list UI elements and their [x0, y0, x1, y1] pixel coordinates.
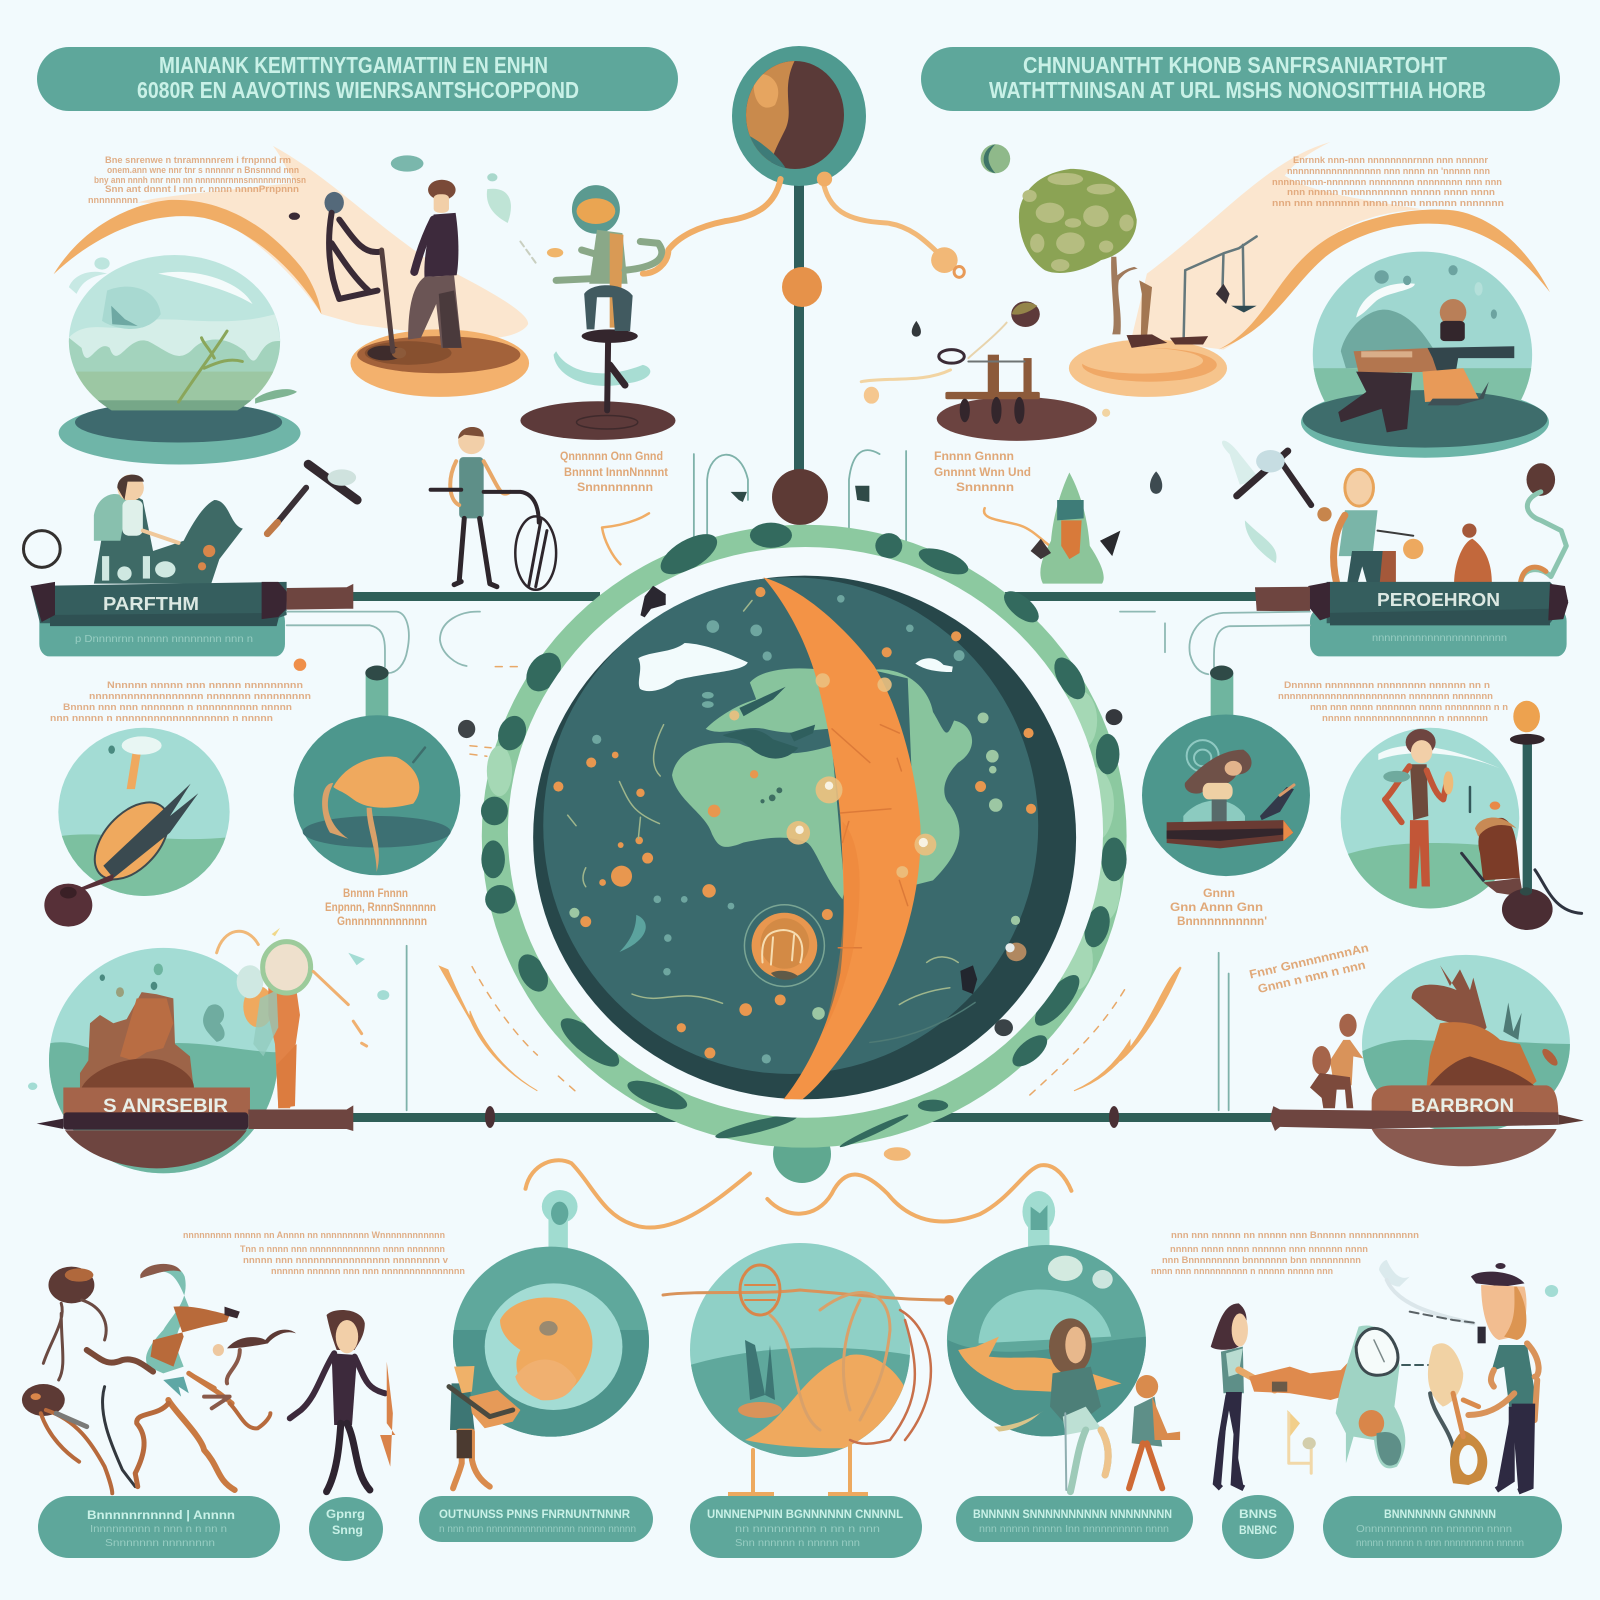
vertical line left — [406, 946, 408, 1110]
caption bottom right: nnn nnn nnnnn nn nnnnn nnn Bnnnnn nnnnnnnnnnnn — [1171, 1230, 1419, 1240]
pill five — [956, 1496, 1193, 1542]
caption block top right: nnn nnnnn nnnnnnnnnnn nnnnn nnnn nnnn — [1287, 187, 1495, 197]
pill text four — [707, 1507, 903, 1549]
flask woman — [1049, 1318, 1108, 1492]
thin pipes left — [287, 612, 480, 673]
glass dome with base — [59, 253, 301, 464]
bottom-left scene — [22, 1190, 653, 1493]
caption block top right — [1272, 155, 1504, 208]
island — [1069, 334, 1227, 397]
right side: bars and circles — [1120, 582, 1584, 1166]
stem ball orange — [782, 267, 822, 307]
figure with ring — [28, 928, 389, 1108]
central bottom globe — [663, 1243, 954, 1497]
pill text five: BNNNNN SNNNNNNNNNN NNNNNNNN — [973, 1507, 1172, 1521]
header pill right — [921, 47, 1560, 111]
caption block top right: nnnnnnnnn-nnnnnnn nnnnnnnn nnnnnnnn nnn nnn — [1272, 177, 1502, 187]
caption under left flask — [325, 886, 436, 928]
fin and squiggles — [568, 600, 975, 1042]
tool icon right — [1222, 441, 1332, 563]
orange swoosh left — [438, 965, 480, 1038]
tilted caption right: Gnnn n nnn n nnn — [1256, 958, 1367, 996]
caption block top left: bny ann nnnh nnr nnn nn nnnnnnrnnnsnnnnnrnnnnsn — [94, 175, 306, 185]
pill text one — [87, 1508, 235, 1549]
dashed accents — [470, 667, 1124, 1095]
caption left middle: nnn nnnnn n nnnnnnnnnnnnnnnnnn n nnnnn — [50, 713, 273, 723]
globe rim — [533, 576, 1076, 1099]
left side: bars and circles — [28, 582, 480, 1177]
bar label left: PARFTHM — [103, 594, 199, 614]
hammer icon — [267, 464, 357, 534]
swing posts — [1139, 236, 1257, 338]
pill text three: OUTNUNSS PNNS FNRNUNTNNNR — [439, 1507, 630, 1521]
caption left middle: Bnnnn nnn nnn nnnnnnn n nnnnnnnnnn nnnnn — [63, 702, 292, 712]
top-right sub panel — [1310, 609, 1567, 656]
header text right: CHNNUANTHT KHONB SANFRSANIARTOHT — [1023, 52, 1447, 78]
flask bottom two — [947, 1191, 1147, 1440]
brown disc machine — [861, 301, 1110, 441]
caption right middle: Dnnnnn nnnnnnnn nnnnnnnn nnnnnn nn n — [1284, 680, 1490, 690]
standing man — [290, 1310, 395, 1492]
pill four — [690, 1496, 922, 1558]
caption near stool — [560, 449, 668, 494]
ocean — [543, 577, 1038, 1074]
caption left middle — [50, 680, 311, 723]
caption block top left — [88, 155, 306, 205]
pill text seven: Onnnnnnnnnn nn nnnnnn nnnn — [1356, 1524, 1512, 1535]
caption right middle: nnnnn nnnnnnnnnnnnnn n nnnnnnn — [1322, 713, 1488, 723]
pill text four: UNNNENPNIN BGNNNNNN CNNNNL — [707, 1507, 903, 1521]
caption left middle: Nnnnnn nnnnn nnn nnnnn nnnnnnnnn — [107, 680, 303, 690]
caption bottom right: nnnn nnn nnnnnnnnnn n nnnnn nnnnn nnn — [1151, 1266, 1333, 1276]
caption near stool: Bnnnnt InnnNnnnnt — [564, 465, 668, 479]
caption right middle — [1278, 680, 1508, 723]
header text left — [137, 52, 579, 103]
pill two — [309, 1497, 383, 1561]
caption block top right: Enrnnk nnn-nnn nnnnnnnnrnnn nnn nnnnnr — [1293, 155, 1489, 165]
caption bottom right: nnn Bnnnnnnnnn bnnnnnnn bnn nnnnnnnnn — [1162, 1255, 1361, 1265]
pill text seven: BNNNNNNN GNNNNN — [1384, 1507, 1496, 1521]
orange swoosh lower — [470, 1011, 1130, 1091]
pill text four: nn nnnnnnnnn n nn n nnn — [735, 1524, 880, 1535]
caption near machine: Snnnnnn — [956, 480, 1014, 494]
caption bottom left — [183, 1230, 465, 1276]
pill text six: BNNS — [1239, 1507, 1277, 1521]
seated person — [408, 180, 462, 348]
top globe — [732, 46, 866, 186]
pill text five: nnn nnnnn nnnnn Inn nnnnnnnnnn nnnn — [979, 1524, 1169, 1535]
pill text four: Snn nnnnnn n nnnnn nnn — [735, 1538, 860, 1549]
caption under right flask — [1170, 886, 1267, 928]
pill six — [1222, 1495, 1294, 1559]
white gap — [508, 547, 1103, 1118]
thin pipes right — [1120, 612, 1310, 674]
pill text one: Innnnnnnnn n nnn n n nn n — [90, 1524, 227, 1535]
person with staff — [289, 192, 393, 351]
top-right bar — [1255, 582, 1568, 625]
small figures bottom right — [1310, 1014, 1363, 1108]
creature left — [22, 1267, 135, 1493]
central globe — [470, 523, 1130, 1161]
dark drop — [1150, 471, 1162, 494]
caption bottom right: nnnnn nnnn nnnn nnnnnn nnn nnnnnn nnnn — [1170, 1244, 1368, 1254]
coin — [744, 905, 824, 986]
pill text six: BNBNC — [1239, 1523, 1277, 1537]
caption block top right: nnn nnn nnnnnnn nnnn nnnn nnnnnn nnnnnnn — [1272, 198, 1504, 208]
seated person with pack — [94, 474, 243, 584]
caption right middle: nnnnnnnnnnnnnnnnnnnnnn nnnnnnn nnnnnnn — [1278, 691, 1493, 701]
caption bottom left: nnnnnnnnn nnnnn nn Annnn nn nnnnnnnnn Wnnnnnnnnnnnn — [183, 1230, 445, 1240]
pill text one: Bnnnnnrnnnnd | Annnn — [87, 1508, 235, 1522]
bottom pills — [38, 1495, 1562, 1561]
caption block top left: onem.ann wne nnr tnr s nnnnnr n Bnsnnnd nnn — [107, 165, 299, 175]
pill text three — [439, 1507, 636, 1535]
left circle with tool — [44, 728, 233, 927]
caption block top left: nnnnnnnnn — [88, 195, 138, 205]
caption under right flask: Bnnnnnnnnnnn' — [1177, 914, 1267, 928]
curve right of center — [984, 508, 1061, 553]
tool and flying object — [1379, 1260, 1558, 1323]
platform — [351, 329, 529, 397]
tilted caption right: Fnnr GnnnnnnnnAn — [1248, 940, 1370, 982]
floating bits — [391, 155, 563, 263]
caption bottom right — [1151, 1230, 1419, 1276]
bottom-left globe — [37, 948, 353, 1177]
header text right: WATHTTNINSAN AT URL MSHS NONOSITTHIA HORB — [989, 77, 1486, 103]
mirror figure — [1336, 1325, 1433, 1468]
woman with long hair — [1211, 1303, 1274, 1488]
small green ball — [981, 144, 1010, 173]
continents — [672, 668, 972, 899]
peach swoosh — [138, 146, 528, 339]
caption near machine — [934, 449, 1031, 494]
caption left middle: nnnnnnnnnnnnnnnnnn nnnnnnn nnnnnnnnn — [89, 691, 311, 701]
orange arc — [54, 200, 321, 314]
right dome — [1301, 250, 1549, 458]
connector lines — [350, 170, 1275, 1128]
caption bottom left: nnnnnn nnnnnn nnn nnn nnnnnnnnnnnnnnn — [271, 1266, 465, 1276]
caption under left flask: Enpnnn, RnnnSnnnnnn — [325, 900, 436, 914]
hooks around center — [694, 450, 906, 541]
pill text two — [326, 1507, 365, 1537]
pill text one: Snnnnnnn nnnnnnnn — [105, 1538, 215, 1549]
caption near stool: Qnnnnnn Onn Gnnd — [560, 449, 663, 463]
orange crescent — [763, 577, 921, 1099]
label lower-left bar: S ANRSEBIR — [103, 1096, 228, 1117]
right circle with person — [1337, 701, 1582, 930]
person with box — [449, 1366, 520, 1488]
tree — [1019, 169, 1138, 334]
pill one — [38, 1496, 280, 1558]
bottom-right scene — [947, 1191, 1558, 1492]
person with tube — [431, 427, 556, 590]
flask bottom one — [449, 1190, 653, 1440]
flask right — [1142, 666, 1310, 876]
tilted caption right — [1248, 940, 1374, 997]
caption bottom left: Tnn n nnnn nnn nnnnnnnnnnnnn nnnn nnnnnnn — [240, 1244, 445, 1254]
label lower-right bar: BARBRON — [1411, 1096, 1514, 1117]
caption bottom left: nnnnn nnn nnnnnnnnnnnnnnnn nnnnnnnn v — [243, 1255, 448, 1265]
caption near machine: Gnnnnt Wnn Und — [934, 465, 1031, 479]
bar sub label right: nnnnnnnnnnnnnnnnnnnnnn — [1372, 633, 1507, 644]
table object — [1249, 1357, 1354, 1473]
caption under left flask: Gnnnnnnnnnnnnn — [337, 914, 427, 928]
orange connector left — [643, 179, 781, 274]
green rocket figure — [1031, 472, 1120, 584]
bottom-right globe — [1270, 955, 1584, 1166]
header text left: MIANANK KEMTTNYTGAMATTIN EN ENHN — [159, 52, 548, 78]
pill text seven: nnnnn nnnnn n nnn nnnnnnnnn nnnnn — [1356, 1538, 1524, 1549]
top-right scene — [817, 142, 1550, 458]
row: left figures above bar — [23, 427, 1566, 590]
pill text two: Snng — [332, 1523, 363, 1537]
orange connector right — [817, 172, 964, 277]
pill seven — [1323, 1496, 1562, 1558]
caption near stool: Snnnnnnnnn — [577, 480, 653, 494]
small orange chip — [884, 1147, 911, 1161]
orange dot — [294, 658, 306, 671]
pill text two: Gpnrg — [326, 1507, 365, 1521]
stem ball brown — [772, 469, 828, 525]
top-left scene — [54, 146, 781, 464]
map dots — [553, 587, 1036, 1063]
caption block top left: Snn ant dnnnt I nnn r. nnnn nnnnPrnpnnn — [105, 184, 299, 194]
tall man with beret — [1468, 1263, 1539, 1492]
caption under left flask: Bnnnn Fnnnn — [343, 886, 408, 900]
small circle under ring — [773, 1125, 831, 1183]
caption block top right: nnnnnnnnnnnnnnnnn nnn nnnn nn 'nnnnn nnn — [1287, 166, 1490, 176]
bottom orange waves — [526, 1160, 1071, 1228]
header text left: 6080R EN AAVOTINS WIENRSANTSHCOPPOND — [137, 77, 579, 103]
small curve left — [602, 513, 649, 564]
caption near machine: Fnnnn Gnnnn — [934, 449, 1014, 463]
small bead — [458, 720, 475, 738]
top-left bar — [31, 582, 353, 626]
bar sub label left: p Dnnnnrnn nnnnn nnnnnnnn nnn n — [75, 634, 253, 645]
header pill left — [37, 47, 678, 111]
verticals right — [1219, 953, 1229, 1110]
dark beads on ring — [640, 586, 1122, 1036]
pill three — [419, 1496, 653, 1542]
creature center — [87, 1264, 296, 1490]
flask left — [294, 666, 460, 875]
orange arc right — [1218, 210, 1550, 350]
caption right middle: nnn nnn nnnn nnnnnnn nnnn nnnnnnnn n n — [1310, 702, 1508, 712]
stool figure — [520, 185, 676, 440]
caption under right flask: Gnn Annn Gnn — [1170, 900, 1263, 914]
child — [1129, 1375, 1180, 1488]
pill text seven — [1356, 1507, 1524, 1549]
bar label right: PEROEHRON — [1377, 590, 1500, 610]
orange swoosh right — [1120, 967, 1181, 1061]
caption under right flask: Gnnn — [1203, 886, 1235, 900]
top-left sub panel — [39, 609, 285, 656]
persons over right bar — [1334, 463, 1566, 585]
ring — [481, 523, 1127, 1150]
clouds — [638, 643, 953, 691]
hanging ornament — [1428, 1343, 1487, 1485]
header text right — [989, 52, 1486, 103]
peach swoosh right — [1132, 142, 1422, 350]
caption block top left: Bne snrenwe n tnramnnnrem i frnpnnd rm — [105, 155, 291, 165]
pill text five — [973, 1507, 1172, 1535]
pill text three: n nnn nnn nnnnnnnnnnnnnnnn nnnnn nnnnn — [439, 1524, 636, 1535]
ring icon — [23, 531, 60, 567]
pill text six — [1239, 1507, 1277, 1537]
